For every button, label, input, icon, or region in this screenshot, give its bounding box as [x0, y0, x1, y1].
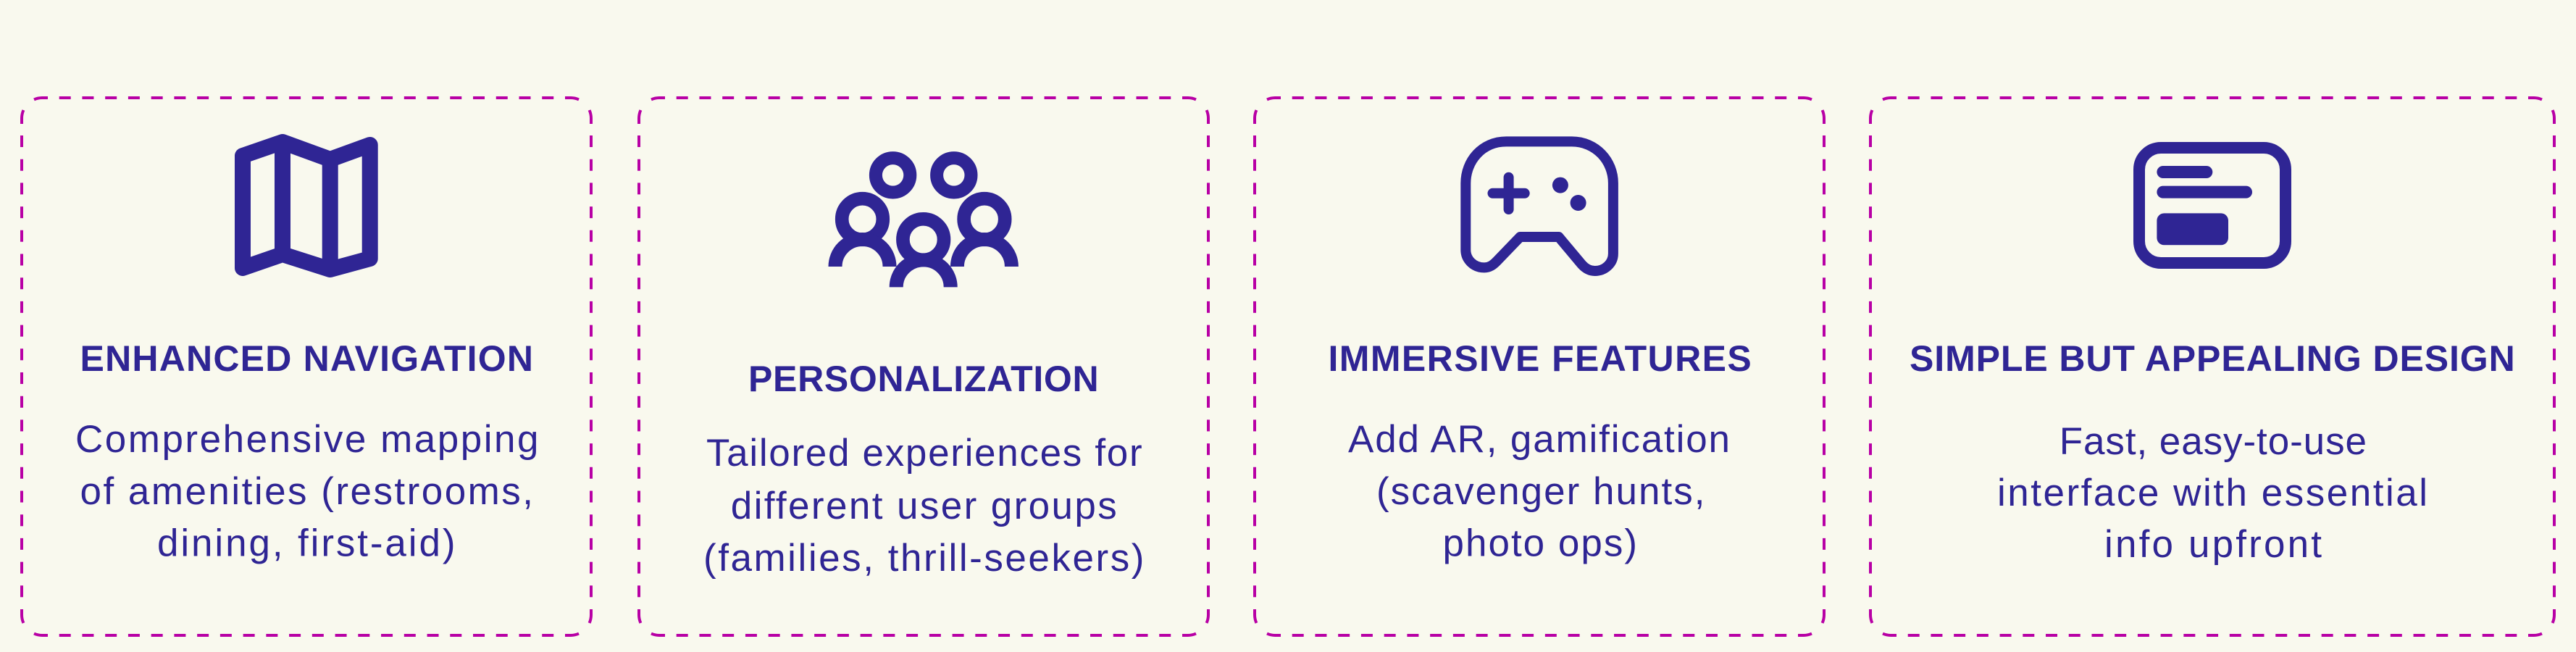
heading: enhanced navigation: ENHANCED NAVIGATION [80, 338, 533, 379]
dashed panel border [639, 98, 1208, 635]
icon: game controller [1465, 141, 1613, 271]
body text: immersive features: photo ops) [1443, 522, 1637, 565]
heading: personalization: PERSONALIZATION [748, 359, 1099, 399]
dashed panel border [1255, 98, 1824, 635]
panel: immersive features [1255, 98, 1824, 635]
heading: immersive features: IMMERSIVE FEATURES [1329, 338, 1752, 379]
dashed panel border [22, 98, 591, 635]
body text: immersive features [1348, 418, 1730, 565]
body text: immersive features: Add AR, gamification [1348, 418, 1730, 461]
icon: folded map [243, 142, 370, 269]
body text: personalization: Tailored experiences for [706, 432, 1142, 475]
icon: interface window [2139, 148, 2286, 263]
body text: personalization: different user groups [731, 485, 1117, 527]
body text: immersive features: (scavenger hunts, [1376, 470, 1705, 513]
body text: simple but appealing design [1997, 420, 2427, 566]
body text: enhanced navigation [75, 418, 539, 565]
body text: enhanced navigation: Comprehensive mapping [75, 418, 539, 461]
body text: simple but appealing design: info upfront [2104, 523, 2322, 566]
body text: simple but appealing design: Fast, easy-to-use [2059, 420, 2367, 463]
icon: group of people [835, 158, 1011, 287]
dashed panel border [1870, 98, 2554, 635]
panel: enhanced navigation [22, 98, 591, 635]
body text: personalization [703, 432, 1144, 580]
panel: simple but appealing design [1870, 98, 2554, 635]
body text: enhanced navigation: dining, first-aid) [157, 522, 455, 565]
body text: enhanced navigation: of amenities (restrooms, [80, 470, 533, 513]
body text: simple but appealing design: interface with essential [1997, 472, 2427, 514]
body text: personalization: (families, thrill-seekers) [703, 537, 1144, 580]
heading: simple but appealing design: SIMPLE BUT APPEALING DESIGN [1910, 338, 2515, 379]
panel: personalization [639, 98, 1208, 635]
